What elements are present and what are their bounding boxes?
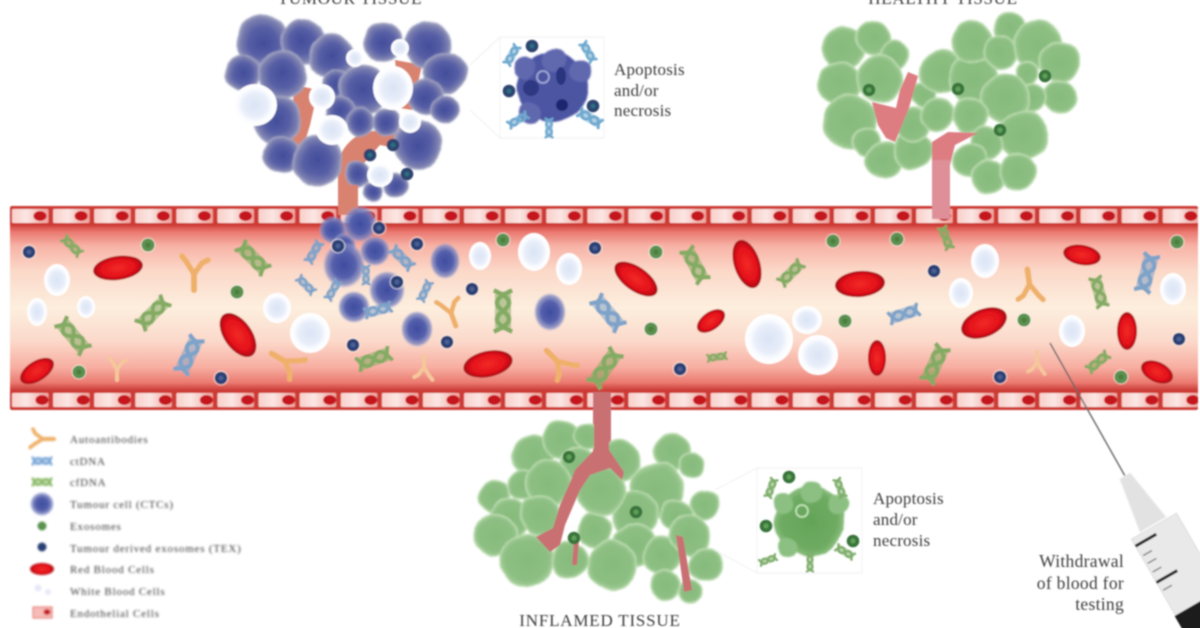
legend: cfDNA: cfDNA xyxy=(70,477,106,489)
top endothelial cells xyxy=(10,206,1198,226)
inflamed exosomes xyxy=(563,451,575,463)
syringe hub xyxy=(1112,468,1166,532)
legend: exosomes xyxy=(38,521,122,533)
legend: endothelial cells xyxy=(33,607,160,620)
legend: tumour cell xyxy=(30,492,174,516)
healthy exosomes xyxy=(863,84,875,96)
legend: red blood cells xyxy=(30,563,155,576)
apoptosis label: tumour: Apoptosis xyxy=(614,60,685,79)
apoptosis label: tumour: necrosis xyxy=(614,101,671,120)
withdrawal label: testing xyxy=(1075,594,1124,614)
legend: endothelial cells: Endothelial Cells xyxy=(70,608,160,620)
legend: ctDNA: ctDNA xyxy=(70,456,106,468)
tumour tissue cluster xyxy=(225,16,466,212)
inset ctDNA fragments xyxy=(502,40,604,138)
withdrawal label: Withdrawal xyxy=(1039,551,1124,571)
apoptotic green cell xyxy=(773,481,848,558)
apoptotic tumour cell xyxy=(514,48,592,125)
apoptosis label: inflamed: and/or xyxy=(873,510,918,529)
plunger xyxy=(1175,589,1200,628)
apoptosis inset: inflamed xyxy=(715,468,862,573)
apoptosis inset: tumour xyxy=(470,37,604,138)
healthy branch vessels xyxy=(872,72,918,142)
ctDNA fragments xyxy=(173,239,1160,376)
inset exosomes xyxy=(783,471,795,483)
syringe xyxy=(1050,343,1200,628)
legend: tumour cell: Tumour cell (CTCs) xyxy=(70,499,174,511)
inflamed tissue cluster xyxy=(474,395,722,603)
legend: white blood cells xyxy=(34,584,165,598)
legend: autoantibodies xyxy=(30,429,148,447)
inflamed branch vessels xyxy=(536,395,624,552)
tumour derived exosomes xyxy=(22,220,1186,386)
needle xyxy=(1050,343,1125,476)
vessel connections through the wall xyxy=(338,160,950,470)
syringe barrel xyxy=(1131,513,1200,615)
exosomes xyxy=(72,232,1184,384)
white blood cells xyxy=(27,233,1186,375)
blood vessel xyxy=(10,206,1198,410)
circulating tumour cells xyxy=(319,206,566,347)
legend: tumour derived exosomes: Tumour derived exosomes (TEX) xyxy=(70,543,242,555)
legend: exosomes: Exosomes xyxy=(70,521,122,533)
healthy tissue cluster xyxy=(819,13,1080,217)
apoptosis label: inflamed: necrosis xyxy=(873,531,930,550)
legend: red blood cells: Red Blood Cells xyxy=(70,564,155,576)
healthy green cells xyxy=(819,13,1080,194)
legend xyxy=(30,429,242,620)
legend: ctDNA xyxy=(32,456,106,468)
legend: cfDNA xyxy=(32,477,106,489)
apoptosis label: tumour: and/or xyxy=(614,81,659,100)
barrel markings xyxy=(1135,534,1177,583)
autoantibodies xyxy=(109,256,1045,383)
tumour exosomes xyxy=(364,149,376,161)
inset frame xyxy=(715,468,862,573)
inset cfDNA fragments xyxy=(758,477,856,572)
tumour feeding vessel xyxy=(282,60,422,212)
bottom endothelial cells xyxy=(10,390,1198,410)
inset frame xyxy=(470,37,604,138)
vessel lumen xyxy=(10,224,1198,391)
white cells in tumour xyxy=(233,39,421,187)
withdrawal label: of blood for xyxy=(1037,573,1124,593)
inset exosomes xyxy=(526,40,538,52)
red blood cells xyxy=(16,236,1177,390)
apoptosis label: inflamed: Apoptosis xyxy=(873,489,944,508)
tumour cells xyxy=(225,16,466,201)
legend: white blood cells: White Blood Cells xyxy=(70,586,165,598)
legend: autoantibodies: Autoantibodies xyxy=(70,434,148,446)
inflamed green cells xyxy=(474,421,722,603)
cfDNA fragments xyxy=(54,225,1111,389)
